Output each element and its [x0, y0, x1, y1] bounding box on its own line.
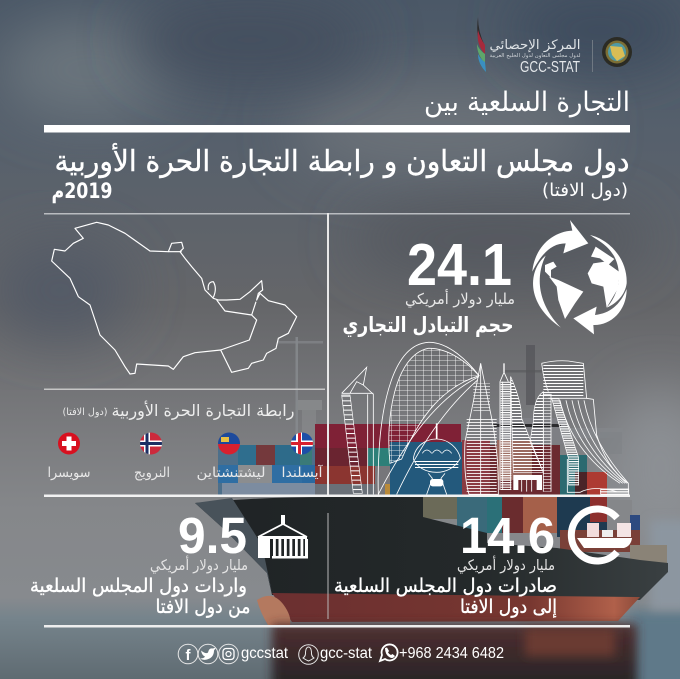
icon: twitter: [198, 644, 218, 664]
imports unit: مليار دولار أمريكي: [150, 555, 248, 574]
logo swoosh: [477, 17, 486, 72]
total trade label: حجم التبادل التجاري: [342, 313, 514, 338]
logo text: لدول مجلس التعاون لدول الخليج العربية: [490, 53, 581, 59]
handle: gcc-stat: gcc-stat: [320, 645, 373, 662]
bow bulb: [257, 596, 290, 625]
footer contacts: [178, 644, 504, 664]
icon: container with crane hook: [258, 515, 308, 558]
icon: snapchat: [299, 645, 318, 664]
handle: gccstat: gccstat: [241, 645, 289, 662]
frame lines: [44, 213, 630, 214]
phone number: +968 2434 6482: [399, 645, 504, 662]
logo text: GCC-STAT: [520, 59, 580, 76]
tower: slim twin: [530, 392, 552, 492]
hull: [195, 497, 668, 600]
flag: Iceland: [291, 432, 313, 454]
container ship photo: [195, 337, 668, 679]
label: Norway: النرويج: [134, 465, 170, 481]
white title bar: [44, 125, 630, 132]
icon: facebook: f: [186, 647, 192, 664]
icon: globe with recycling arrows: [532, 220, 627, 334]
GCC emblem: [602, 37, 632, 67]
flag: Liechtenstein: [218, 432, 240, 454]
tower: Bahrain spire: [500, 363, 543, 492]
ship mast and superstructure: [278, 337, 623, 490]
icon: cargo ship in C ring: [571, 509, 632, 561]
skyline left half: [342, 342, 498, 494]
subtitle: (دول الافتا): [542, 180, 628, 201]
flag: Norway: [140, 432, 162, 454]
reflection in water: [272, 624, 637, 679]
country labels: [48, 464, 324, 481]
title line 2: دول مجلس التعاون و رابطة التجارة الحرة الأوربية: [54, 142, 630, 178]
exports label line 2: إلى دول الافتا: [460, 596, 557, 619]
icon: whatsapp: [380, 644, 398, 661]
icon: facebook: [178, 644, 198, 664]
tower: dome: [413, 423, 460, 494]
arch building: [378, 342, 479, 494]
label: Liechtenstein: ليشتنشتاين: [196, 465, 266, 481]
exports value: 14.6: [460, 507, 555, 564]
year: 2019م: [52, 179, 112, 203]
label: Switzerland: سويسرا: [48, 465, 90, 481]
title line 1: التجارة السلعية بين: [424, 87, 630, 118]
hull red boot: [272, 593, 640, 622]
slate bow plating: [195, 498, 272, 593]
exports label line 1: صادرات دول المجلس السلعية: [334, 575, 557, 597]
icon: instagram: [219, 644, 238, 664]
logo text: المركز الإحصائي: [490, 38, 580, 53]
tower: left ladder: [342, 367, 373, 494]
imports label line 2: من دول الافتا: [156, 596, 250, 618]
flag: Switzerland: [58, 432, 80, 454]
EFTA title: رابطة التجارة الحرة الأوربية: [112, 400, 294, 421]
label: Iceland: آيسلندا: [282, 464, 324, 481]
imports label line 1: واردات دول المجلس السلعية: [30, 575, 247, 597]
tower: curved right: [542, 361, 629, 494]
EFTA heading: [62, 400, 294, 421]
unit label: مليار دولار أمريكي: [405, 289, 515, 309]
logo text: [490, 38, 581, 76]
logo: GCC-STAT: [477, 17, 632, 76]
exports unit: مليار دولار أمريكي: [457, 555, 555, 574]
skyline illustration: [342, 342, 629, 494]
container stacks: [218, 424, 667, 567]
tower: sail: [465, 363, 498, 494]
GCC map: [52, 222, 297, 374]
logo divider: [592, 40, 593, 72]
imports value: 9.5: [178, 507, 247, 564]
skyline right half: [500, 361, 629, 494]
total trade value: 24.1: [407, 232, 512, 298]
EFTA abbreviation: (دول الافتا): [62, 407, 108, 418]
